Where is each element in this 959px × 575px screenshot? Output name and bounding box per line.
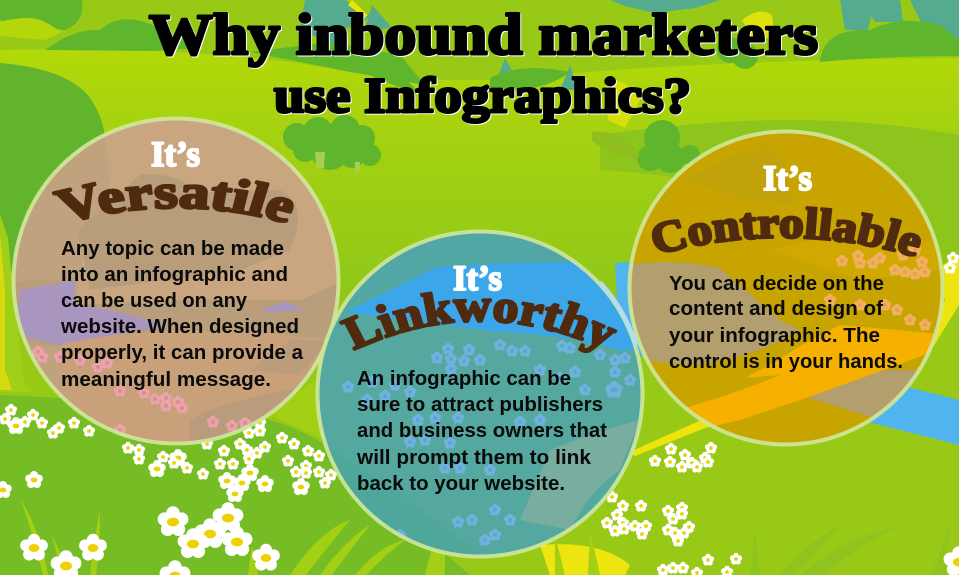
body text: [669, 273, 903, 373]
body text: and business owners that: [357, 420, 607, 442]
distant conifer trees: [300, 0, 959, 90]
heading: It's: It’s: [763, 158, 812, 198]
daisies: left meadow: [0, 404, 337, 575]
grass blades: [20, 498, 600, 575]
body text: Any topic can be made: [61, 238, 284, 260]
body text: can be used on any: [61, 290, 248, 312]
panel: Linkworthy circle: [316, 230, 644, 558]
path and river on the right: [615, 260, 959, 445]
body text: [60, 238, 304, 391]
heading: It's: It’s: [151, 134, 200, 174]
body text: You can decide on the: [669, 273, 884, 295]
title: use Infographics?: [274, 67, 691, 123]
circle 1 scenery: [16, 138, 336, 441]
heading: Linkworthy: Linkworthy: [339, 292, 618, 354]
left tree trunk: [0, 215, 32, 392]
body text: into an infographic and: [61, 264, 288, 286]
body text: meaningful message.: [61, 369, 271, 391]
circle 3 scenery: [628, 145, 950, 432]
heading: It's: It’s: [453, 258, 502, 298]
body text: properly, it can provide a: [61, 342, 304, 364]
body text: [356, 368, 607, 495]
body text: will prompt them to link: [356, 447, 592, 469]
heading: Controllable: Controllable: [652, 206, 921, 257]
body text: control is in your hands.: [669, 351, 903, 373]
title: [149, 2, 818, 123]
body text: back to your website.: [357, 473, 565, 495]
mid trees: [283, 115, 700, 173]
mid ground: [0, 49, 959, 300]
far trees and hills: [0, 0, 959, 95]
body text: your infographic. The: [669, 325, 880, 347]
left big hill: [0, 63, 106, 280]
body text: An infographic can be: [357, 368, 571, 390]
body text: sure to attract publishers: [357, 394, 603, 416]
panel: Versatile circle: [12, 116, 340, 446]
heading: Versatile: Versatile: [52, 178, 294, 223]
body text: website. When designed: [60, 316, 299, 338]
title: Why inbound marketers: [149, 2, 818, 67]
daisies: right meadow: [601, 252, 959, 575]
front left hill: [0, 395, 470, 575]
circle 2 scenery: [342, 262, 638, 546]
panel: Controllable circle: [628, 130, 944, 446]
body text: content and design of: [669, 298, 883, 320]
